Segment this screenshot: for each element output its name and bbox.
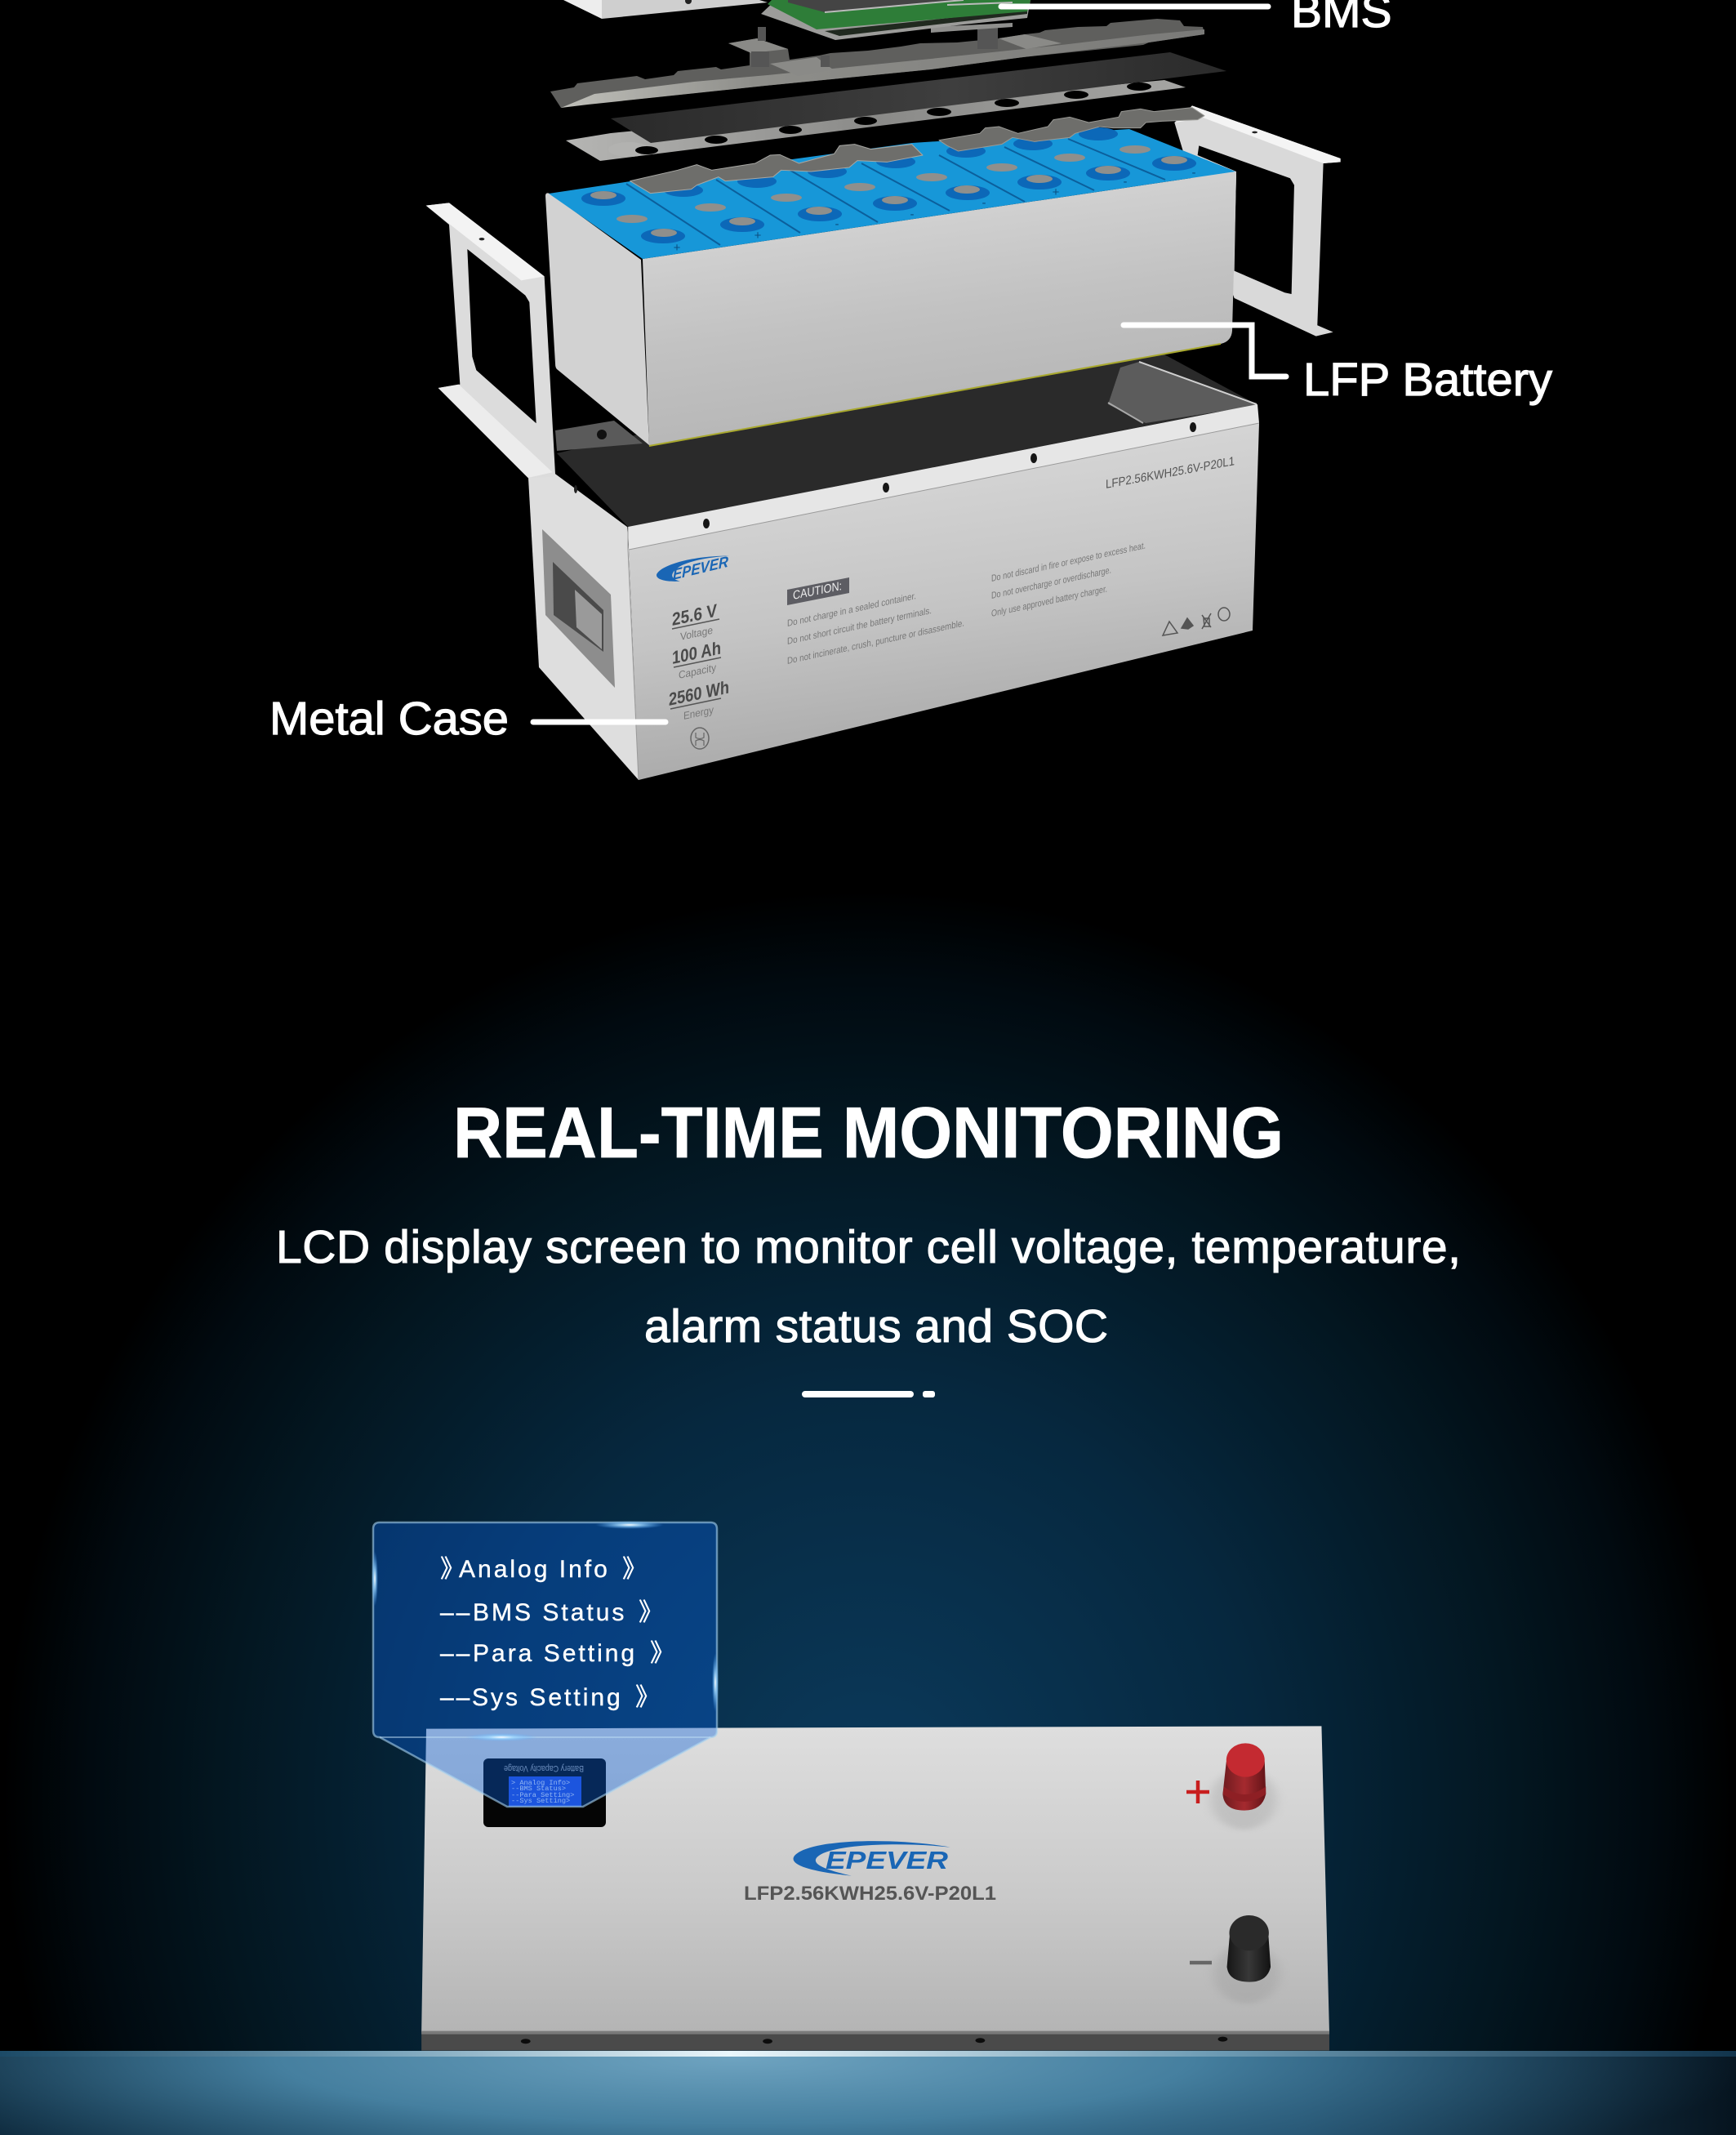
divider bbox=[802, 1391, 935, 1397]
menu text bbox=[440, 1549, 677, 1713]
tray body bbox=[550, 19, 1204, 108]
case label: caution box: CAUTION: bbox=[793, 579, 842, 603]
logo swoosh bbox=[794, 1841, 950, 1876]
callout: Metal Case: Metal Case bbox=[269, 693, 509, 745]
LCD display unit: Battery Capacity Voltage bbox=[504, 1763, 584, 1773]
LCD screen bbox=[509, 1776, 581, 1807]
menu text: 》 bbox=[635, 1677, 662, 1713]
battery top: blue cells bbox=[549, 129, 1235, 259]
case label: ratings: Energy bbox=[683, 703, 714, 722]
polarity marks: - bbox=[1124, 175, 1127, 189]
LCD display unit bbox=[483, 1758, 606, 1827]
busbars right bbox=[939, 108, 1204, 151]
BMS board bbox=[761, 0, 1030, 40]
LCD display unit: --Para Setting> bbox=[511, 1791, 574, 1799]
busbars bbox=[630, 145, 923, 194]
LFP battery pack bbox=[545, 108, 1236, 446]
case label: warnings: Do not incinerate, crush, puncture or disassemble. bbox=[787, 617, 964, 666]
hologram outline bbox=[373, 1522, 717, 1807]
battery side face bbox=[545, 193, 649, 445]
menu text: Sys Setting bbox=[472, 1684, 623, 1711]
knob shadows bbox=[1211, 1770, 1280, 2004]
case label: warnings: Only use approved battery charger. bbox=[991, 584, 1107, 619]
case label: brand bbox=[657, 556, 729, 582]
menu text: –– bbox=[440, 1640, 472, 1667]
polarity marks: - bbox=[910, 207, 915, 221]
polarity marks: - bbox=[1192, 166, 1195, 180]
right bracket bbox=[1174, 105, 1341, 337]
menu text: Para Setting bbox=[473, 1640, 637, 1667]
case label: EPEVER wordmark: EPEVER bbox=[673, 554, 728, 584]
plus sign bbox=[1186, 1781, 1209, 1803]
tray standoffs bbox=[751, 27, 998, 67]
case label: ratings bbox=[669, 600, 729, 749]
black negative terminal bbox=[1227, 1915, 1271, 1982]
callout: LFP Battery: LFP Battery bbox=[1303, 354, 1553, 406]
case label: model: LFP2.56KWH25.6V-P20L1 bbox=[1106, 454, 1235, 492]
menu text: Analog Info bbox=[459, 1556, 610, 1583]
top housing bbox=[563, 0, 768, 19]
menu text: 》 bbox=[650, 1633, 677, 1669]
case label: ratings: Voltage bbox=[680, 624, 713, 643]
logo wordmark: EPEVER bbox=[826, 1846, 949, 1874]
model label: LFP2.56KWH25.6V-P20L1 bbox=[744, 1883, 996, 1905]
red positive terminal bbox=[1222, 1743, 1266, 1811]
hologram callout bbox=[372, 1521, 719, 1807]
battery front face bbox=[643, 172, 1236, 446]
yellow seam bbox=[649, 344, 1221, 446]
glow highlights bbox=[372, 1521, 719, 1741]
exploded battery diagram bbox=[426, 0, 1341, 780]
battery front panel bbox=[421, 1726, 1329, 2051]
polarity marks: + bbox=[1053, 185, 1060, 199]
terminal caps bbox=[590, 145, 1187, 237]
case label: ratings: 2560 Wh bbox=[669, 677, 729, 710]
menu text: –– bbox=[440, 1599, 472, 1626]
case label: safety icons bbox=[1163, 608, 1230, 635]
polarity marks: - bbox=[982, 196, 986, 210]
case label: warnings bbox=[787, 540, 1146, 666]
menu text: 》 bbox=[622, 1549, 649, 1585]
callout: LFP Battery bbox=[1124, 325, 1553, 406]
LCD display unit: --Sys Setting> bbox=[511, 1797, 570, 1805]
LCD display unit: > Analog Info> bbox=[511, 1779, 570, 1787]
polarity marks: + bbox=[674, 241, 681, 255]
metal case interior bbox=[555, 343, 1257, 527]
floor bbox=[0, 2051, 1736, 2135]
polarity marks bbox=[674, 166, 1195, 255]
menu text: 》 bbox=[440, 1549, 467, 1585]
menu text: BMS Status bbox=[473, 1599, 626, 1626]
polarity marks: - bbox=[835, 217, 839, 231]
case label: ratings: Capacity bbox=[679, 661, 716, 681]
case label: ratings: 25.6 V bbox=[672, 600, 717, 630]
left bracket bbox=[426, 203, 555, 478]
terminals bbox=[581, 127, 1196, 243]
cell divider lines bbox=[626, 139, 1165, 245]
subtitle bbox=[276, 1221, 1461, 1353]
metal busbar tray bbox=[550, 19, 1204, 108]
menu text: 》 bbox=[639, 1592, 665, 1628]
bottom flange bbox=[421, 2032, 1329, 2051]
subtitle: LCD display screen to monitor cell voltage, temperature, bbox=[276, 1221, 1461, 1273]
handle recess bbox=[542, 529, 615, 688]
black sheet bbox=[611, 52, 1226, 143]
panel face bbox=[421, 1726, 1329, 2032]
case label: warnings: Do not charge in a sealed container. bbox=[787, 591, 916, 629]
subtitle: alarm status and SOC bbox=[644, 1300, 1108, 1353]
case label: warnings: Do not discard in fire or expose to excess heat. bbox=[991, 540, 1146, 584]
LCD display unit: --BMS Status> bbox=[511, 1785, 566, 1793]
polarity marks: + bbox=[754, 229, 762, 243]
tray raised tabs bbox=[728, 34, 1062, 76]
minus sign bbox=[1190, 1961, 1212, 1964]
perforated insulation plate bbox=[566, 80, 1186, 161]
case label: ratings: 100 Ah bbox=[672, 638, 721, 668]
metal case bbox=[528, 404, 1259, 780]
case label: warnings: Do not short circuit the battery terminals. bbox=[787, 605, 932, 647]
menu text: –– bbox=[440, 1684, 472, 1711]
hologram panel bbox=[373, 1522, 717, 1807]
tray front lip bbox=[561, 29, 1204, 108]
case label: warnings: Do not overcharge or overdischarge. bbox=[991, 565, 1111, 601]
title: REAL-TIME MONITORING bbox=[453, 1092, 1284, 1173]
